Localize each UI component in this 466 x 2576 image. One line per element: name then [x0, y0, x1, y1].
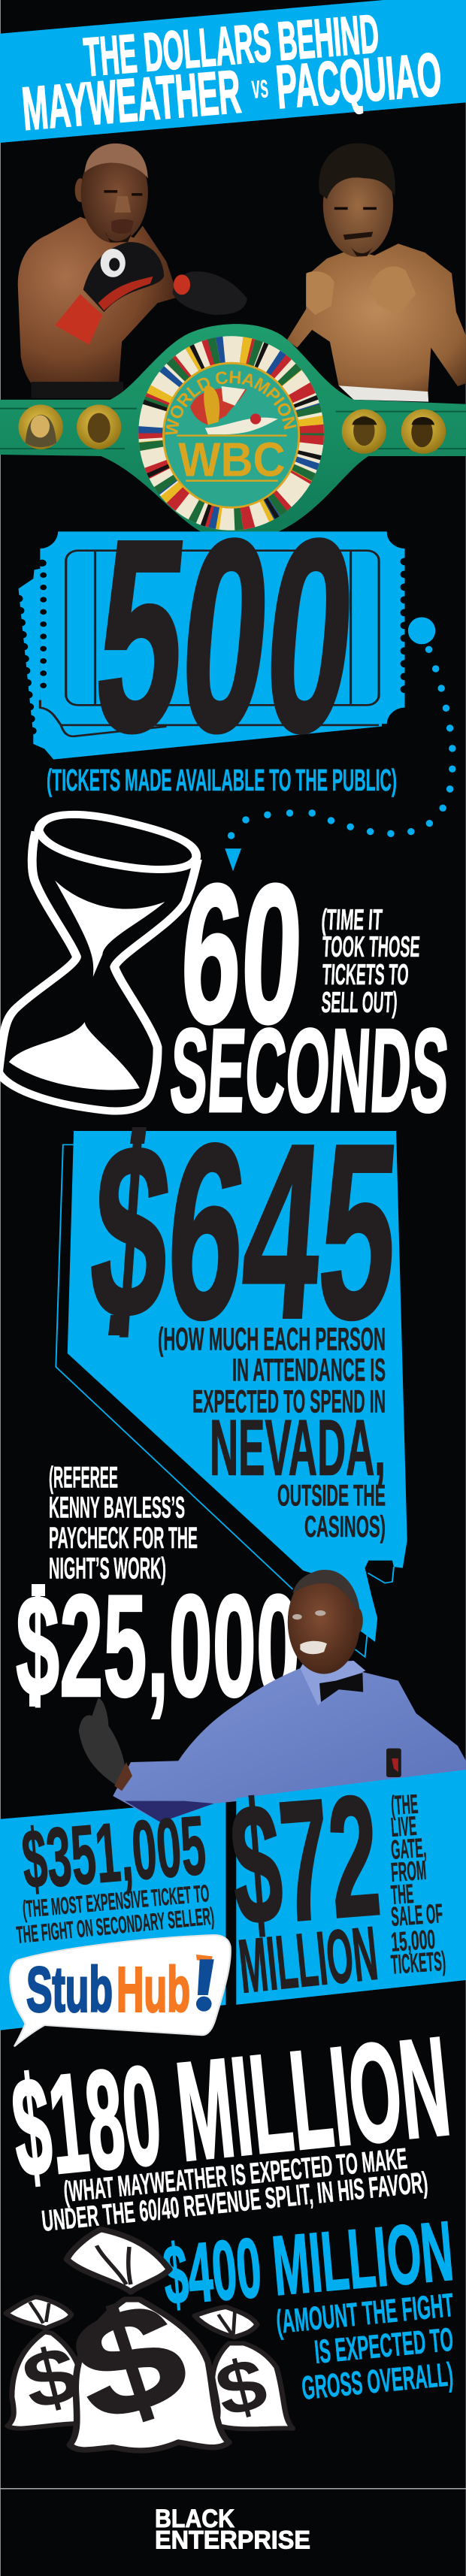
logo: Black Enterprise: [155, 2505, 310, 2555]
caption: referee paycheck: [49, 1461, 198, 1586]
dotted path arrow: [225, 617, 456, 871]
caption: time to sell out: (TIME IT: [321, 904, 383, 936]
right money bag: $: [207, 2341, 274, 2432]
big number: 60 seconds: 60: [176, 843, 307, 1064]
caption: most expensive ticket: [15, 1879, 215, 1949]
big number: $72 million: [225, 1760, 386, 2009]
photo: Pacquiao: [287, 144, 466, 402]
WBC championship belt: [0, 324, 466, 532]
caption: live gate: THE: [390, 1878, 414, 1910]
text: THE FIGHT ON SECONDARY SELLER): [15, 1902, 215, 1949]
big number: 60 seconds: [167, 843, 452, 1137]
logo: StubHub speech bubble: Stub: [26, 1955, 113, 2025]
referee badge: [386, 1749, 401, 1777]
right money bag: [195, 2307, 292, 2432]
back ticket: [19, 569, 382, 760]
belt lettering: [165, 371, 296, 486]
text: PAYCHECK FOR THE: [49, 1522, 198, 1555]
ticket inner outline: [40, 551, 379, 736]
title text line two: vs: [250, 68, 270, 106]
photo: Mayweather: [18, 144, 247, 398]
icon: money bags: [6, 2230, 292, 2456]
belt lettering: WBC: [178, 432, 286, 486]
title text line two: MAYWEATHER: [20, 58, 243, 144]
logo: Black Enterprise: BLACK: [155, 2505, 235, 2533]
caption: live gate: (THE: [390, 1788, 419, 1821]
caption: live gate: LIVE: [390, 1810, 417, 1843]
panel: $72 million background: [236, 1770, 466, 2005]
caption: Nevada spending: [158, 1322, 386, 1543]
center money bag: $: [53, 2266, 204, 2456]
caption: live gate: [390, 1788, 446, 1980]
caption: gross overall: [274, 2287, 455, 2407]
ticket graphic: [14, 531, 409, 760]
footer divider: [0, 2488, 466, 2489]
caption: referee paycheck: KENNY BAYLESS’S: [49, 1491, 185, 1524]
medallions: [19, 405, 446, 454]
icon: hourglass: [0, 815, 198, 1111]
caption: referee paycheck: (REFEREE: [49, 1461, 118, 1494]
logo: StubHub speech bubble: Hub: [116, 1955, 190, 2025]
photo: referee: [79, 1570, 466, 1822]
big number: $351,005: $351,005: [19, 1798, 209, 1906]
panel: $351,005 background: [0, 1800, 225, 2030]
caption: time to sell out: [321, 904, 421, 1019]
logo: StubHub speech bubble: [10, 1935, 231, 2046]
belt lettering: WORLD CHAMPION: [165, 371, 296, 434]
caption: Nevada spending: CASINOS): [304, 1510, 386, 1543]
referee glove: [79, 1698, 126, 1786]
referee shirt: [113, 1668, 466, 1822]
logo: Black Enterprise: ENTERPRISE: [155, 2526, 310, 2555]
center money bag: [53, 2230, 228, 2456]
left money bag: $: [14, 2329, 86, 2427]
caption: referee paycheck: NIGHT’S WORK): [49, 1553, 166, 1586]
title banner: [0, 0, 466, 144]
referee head: [288, 1570, 360, 1674]
map: Nevada shape: [56, 1131, 407, 1657]
front ticket: [40, 531, 405, 724]
referee bow tie: [319, 1673, 363, 1702]
ticket perforations: [14, 558, 409, 735]
StubHub exclamation ticket: [196, 1955, 214, 2012]
flags ring: [152, 349, 311, 517]
text: (THE MOST EXPENSIVE TICKET TO: [21, 1879, 210, 1923]
left money bag: [6, 2297, 86, 2429]
big number: $25,000: [16, 1565, 300, 1727]
belt emblem: [190, 385, 278, 434]
